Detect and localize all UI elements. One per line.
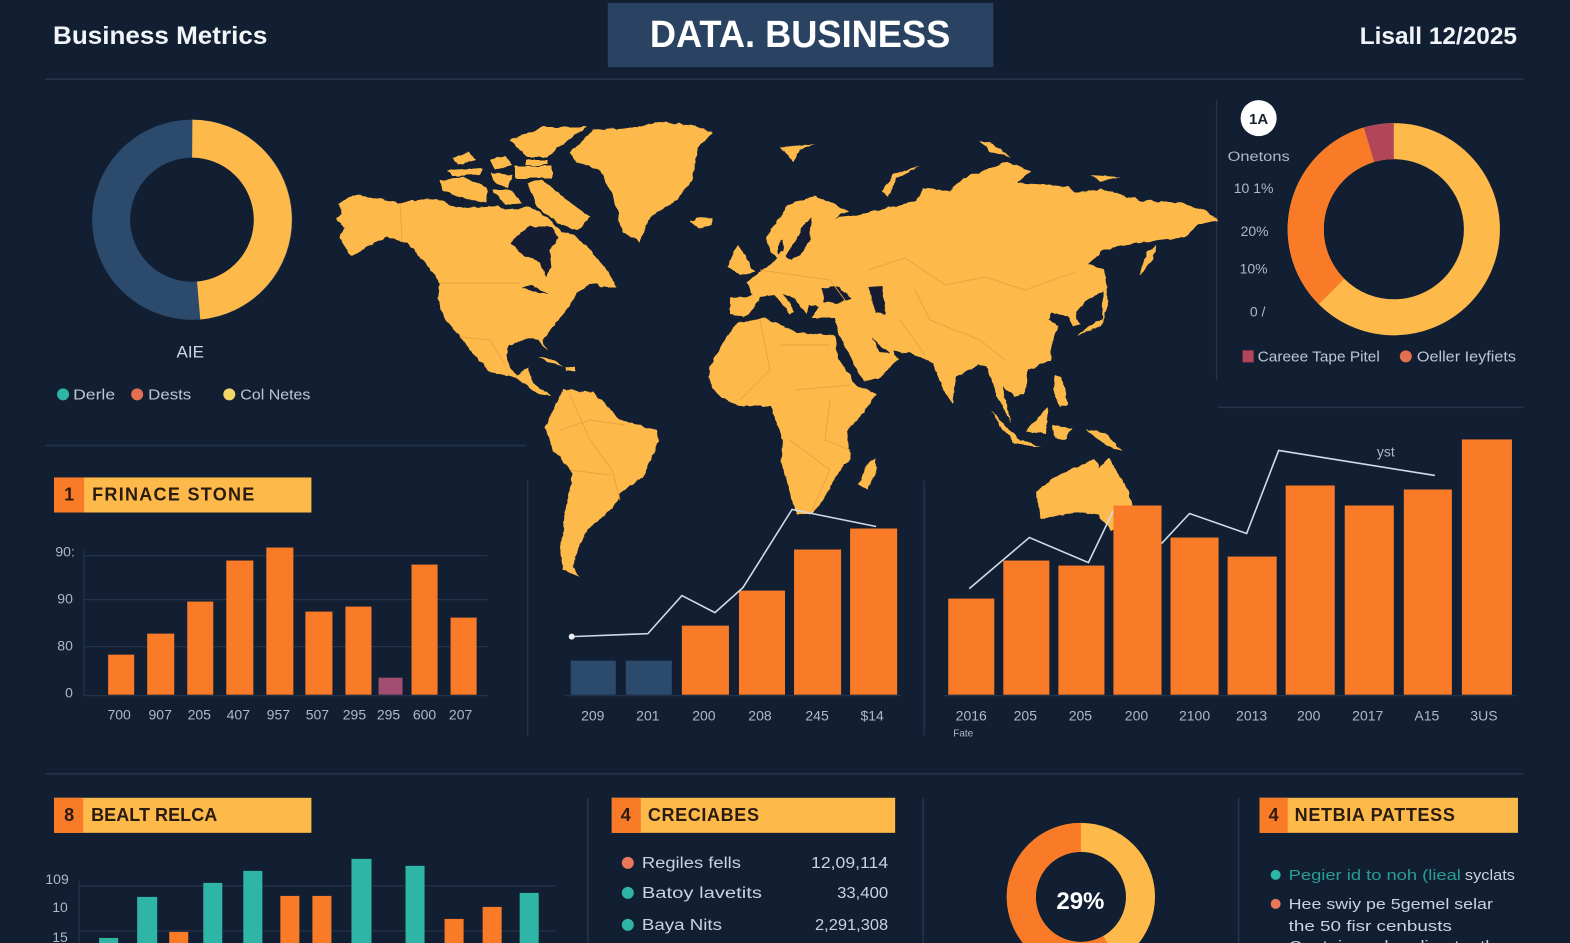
map: inland seas (510, 218, 889, 353)
bar chart with trend line: centre: $14 (860, 708, 884, 724)
world map (335, 122, 1218, 577)
bar chart with trend line: centre: 209 (581, 708, 605, 724)
donut chart: top left: AIE (177, 342, 204, 361)
bar chart: frinace stone: 90 (57, 591, 73, 607)
legend: top left donut: Dests (148, 386, 191, 403)
chart header: bealt relca: BEALT RELCA (91, 805, 217, 825)
bar chart: frinace stone: 957 (267, 707, 290, 723)
scale: top right donut: 0 / (1250, 303, 1266, 319)
bar chart: frinace stone: 205 (188, 707, 211, 723)
map: asian islands (727, 140, 1156, 451)
bar chart: bealt relca: 10 (52, 899, 68, 915)
bar chart with trend line: right: 2016 (956, 708, 987, 724)
bar chart: frinace stone: 80 (57, 638, 73, 654)
bar chart with trend line: right: A15 (1414, 708, 1440, 724)
scale: top right donut: 10 1% (1234, 180, 1273, 196)
bar chart: frinace stone (55, 544, 488, 723)
map: south america (545, 390, 659, 577)
chart header: frinace stone (54, 477, 311, 513)
bar chart: frinace stone: 507 (306, 707, 329, 723)
map: country borders (400, 203, 1075, 510)
donut chart: bottom centre (1021, 837, 1140, 943)
bar chart: frinace stone: 700 (107, 707, 131, 723)
scale: top right donut: 1A (1249, 111, 1268, 128)
bar chart: bealt relca: 109 (45, 871, 69, 887)
list: creciabes values: Batoy lavetits (642, 885, 762, 902)
heading: business metrics: Business Metrics (53, 22, 267, 50)
legend: top right donut: Oeller Ieyfiets (1417, 348, 1516, 365)
title banner (608, 3, 993, 67)
bar chart: frinace stone: 295 (343, 707, 366, 723)
bar chart: frinace stone: 907 (149, 707, 172, 723)
bar chart: frinace stone: 407 (227, 707, 250, 723)
bar chart with trend line: right: 2100 (1179, 708, 1210, 724)
bar chart: frinace stone: 0 (65, 685, 73, 701)
bar chart with trend line: right: 200 (1125, 708, 1148, 724)
legend: top left donut (57, 386, 310, 403)
text block: notes: Pegier id to noh (lieal (1289, 867, 1461, 884)
title banner: DATA. BUSINESS (650, 14, 950, 56)
chart header: bealt relca (54, 798, 311, 833)
date: Lisall 12/2025 (1360, 23, 1517, 50)
bar chart with trend line: right: 2013 (1236, 708, 1267, 724)
scale: top right donut: 20% (1241, 223, 1269, 239)
list: creciabes values: Regiles fells (642, 855, 741, 872)
map: caribbean (538, 357, 575, 371)
legend: top right donut: Careee Tape Pitel (1258, 348, 1380, 365)
map: africa (708, 318, 877, 514)
bar chart with trend line: centre (566, 510, 901, 724)
map: arctic islands (440, 127, 713, 230)
map: greenland (570, 122, 713, 242)
list: creciabes values: Baya Nits (642, 917, 722, 934)
bar chart: frinace stone: 600 (413, 707, 436, 723)
bar chart with trend line: centre: 208 (748, 708, 772, 724)
text block: notes: the 50 fisr cenbusts (1289, 918, 1452, 935)
text block: notes: syclats (1465, 867, 1515, 884)
map: madagascar (859, 458, 877, 490)
map: north america (335, 195, 616, 396)
map: eurasia (730, 162, 1218, 423)
bar chart with trend line: centre: 245 (805, 708, 829, 724)
donut chart: top right (1306, 141, 1482, 317)
legend: top right donut (1243, 348, 1516, 365)
scale: top right donut (1228, 100, 1290, 319)
bar chart with trend line: right: Fate (953, 729, 974, 740)
list: creciabes values: 33,400 (837, 885, 888, 902)
chart header: creciabes: 4 (621, 805, 631, 825)
chart header: netbia patess (1260, 798, 1518, 833)
bar chart: frinace stone: 207 (449, 707, 472, 723)
bar chart with trend line: right: 205 (1014, 708, 1037, 724)
chart header: frinace stone: 1 (64, 485, 74, 504)
bar chart with trend line: right: 3US (1470, 708, 1498, 724)
text block: notes (1271, 867, 1515, 943)
chart header: frinace stone: FRINACE STONE (92, 485, 254, 504)
scale: top right donut: Onetons (1228, 148, 1290, 164)
scale: top right donut: 10% (1240, 260, 1268, 276)
text block: notes: Hee swiy pe 5gemel selar (1289, 896, 1493, 913)
bar chart: bealt relca (45, 859, 556, 943)
bar chart with trend line: centre: 200 (692, 708, 716, 724)
list: creciabes values (622, 855, 888, 934)
legend: top left donut: Col Netes (240, 386, 310, 403)
list: creciabes values: 2,291,308 (815, 917, 888, 934)
chart header: netbia patess: 4 (1269, 805, 1279, 825)
bar chart with trend line: right (943, 439, 1517, 740)
chart header: creciabes: CRECIABES (648, 805, 759, 825)
bar chart with trend line: right: 205 (1069, 708, 1092, 724)
chart header: bealt relca: 8 (64, 805, 74, 825)
bar chart with trend line: centre: 201 (636, 708, 660, 724)
bar chart with trend line: right: 200 (1297, 708, 1321, 724)
donut chart: top left (111, 139, 273, 361)
legend: top left donut: Derle (73, 386, 115, 403)
map: australia (1036, 458, 1132, 532)
list: creciabes values: 12,09,114 (811, 855, 888, 872)
chart header: netbia patess: NETBIA PATTESS (1295, 805, 1455, 825)
bar chart: frinace stone: 90: (55, 544, 75, 560)
bar chart with trend line: right: 2017 (1352, 708, 1384, 724)
bar chart with trend line: right: yst (1377, 443, 1395, 459)
bar chart: frinace stone: 295 (377, 707, 400, 723)
donut chart: bottom centre: 29% (1056, 888, 1104, 915)
chart header: creciabes (612, 798, 895, 833)
